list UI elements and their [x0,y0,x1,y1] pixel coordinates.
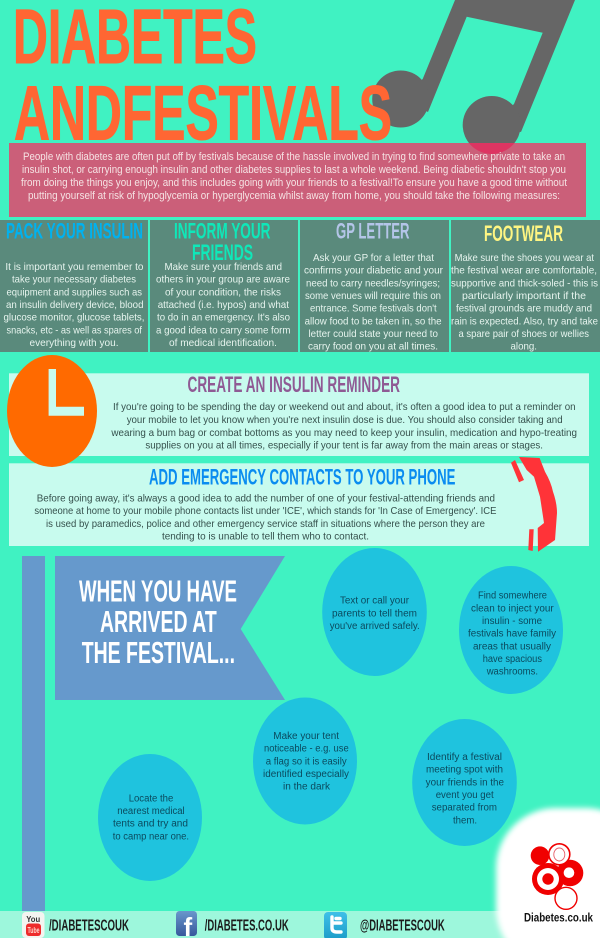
bubble: identify a meeting spot [412,719,517,846]
text: pack your insulin: It is important you remember to [5,261,144,273]
panel: footwear [451,220,600,353]
text: gp letter: Ask your GP for a letter that [313,252,434,264]
text: footwear: a spare pair of shoes or wellies [458,328,589,340]
text: insulin reminder: wearing a bum bag or combat bottoms as you may need to keep your insulin, medication and hypo-treating [110,427,577,439]
bubble: find somewhere clean: areas that usually [473,641,551,652]
heading: inform your friends: FRIENDS [192,240,253,265]
bubble: find somewhere clean: festivals have family [468,629,556,640]
bubble: find somewhere clean: Find somewhere [478,591,548,602]
text: emergency contacts: is used by paramedics, police and other emergency service staff in situations where the person they are [46,518,485,530]
text: inform your friends: Make sure your friends and [164,261,282,273]
flag heading [79,574,237,670]
bubble: locate medical tents: nearest medical [117,806,185,817]
text: inform your friends: of medical identification. [169,337,277,349]
text: inform your friends: of your condition, the risks [165,286,281,298]
bubble: text or call your parents [322,548,427,676]
text: footwear: along. [510,341,537,353]
flag pole [22,556,45,911]
text: pack your insulin: an insulin delivery device, blood [6,299,144,311]
bubble: identify a meeting spot: your friends in the [426,777,505,788]
bubble: make your tent noticeable: identified especially [263,769,349,780]
text: pack your insulin: snacks, etc - as well as spares of [6,324,142,336]
text: gp letter [304,252,443,353]
footer label: twitter: @DIABETESCOUK [360,918,445,935]
text: inform your friends: attached (i.e. hypos) and what [158,299,289,311]
icon: twitter [324,912,347,938]
text: gp letter: confirms your diabetic and your [304,265,443,277]
panel: pack your insulin [0,218,148,352]
bubble: find somewhere clean: clean to inject your [471,603,554,614]
text: emergency contacts: Before going away, it's always a good idea to add the number of one of your festival-attending friends and [37,492,495,504]
white logo blob [496,808,600,938]
text: inform your friends [156,261,291,349]
text: emergency contacts: someone at home to your mobile phone contacts list under 'ICE', which stands for 'In Case of Emergency'. ICE [34,505,496,517]
bubble: identify a meeting spot: them. [453,815,477,826]
text: gp letter: entrance. Some festivals don't [310,303,437,315]
panel: introduction [9,143,586,217]
bubble: make your tent noticeable: in the dark [283,782,330,793]
icon: facebook [176,911,197,938]
bubble: locate medical tents: to camp near one. [113,831,189,842]
text: pack your insulin: glucose monitor, glucose tablets, [4,312,144,324]
text: pack your insulin: take your necessary diabetes [12,274,136,286]
bubble: locate medical tents: tents and try and [113,819,188,830]
bubble: text or call your parents: Text or call your [340,596,410,607]
bubble: text or call your parents: you've arrived safely. [330,621,420,632]
text: footwear: festival grounds are muddy and [456,303,592,315]
bubble: identify a meeting spot: event you get [436,790,494,801]
text: emergency contacts [34,492,496,542]
bubble: identify a meeting spot: Identify a festival [427,752,502,763]
heading: pack your insulin: PACK YOUR INSULIN [6,218,143,244]
text: footwear [451,252,598,353]
bubble: identify a meeting spot: meeting spot with [426,765,503,776]
title [13,0,392,157]
panel: inform your friends [150,218,298,352]
text: inform your friends: to do in an emergency. It's also [157,312,290,324]
text: insulin reminder: If you're going to be spending the day or weekend out and about, it's often a good idea to put a reminder on [113,401,576,413]
text: gp letter: some venues will require this on [305,290,441,302]
text: inform your friends: a good idea to carry some form [156,324,291,336]
footer label: facebook: /DIABETES.CO.UK [205,918,289,935]
heading: inform your friends [174,218,271,265]
text: insulin reminder [110,401,577,452]
icon: youtube: You [26,914,40,924]
panel: gp letter [300,218,449,353]
heading: inform your friends: INFORM YOUR [174,218,271,244]
text: pack your insulin [4,261,144,349]
text: pack your insulin: equipment and supplies such as [6,286,142,298]
bubble: text or call your parents: parents to tell them [332,608,417,619]
introduction text [21,151,567,202]
text: inform your friends: others in your group are aware [156,274,290,286]
bubble: make your tent noticeable: noticeable - e.g. use [264,744,349,755]
text: gp letter: carry food on you at all times. [308,341,438,353]
bubble: make your tent noticeable: Make your tent [273,731,339,742]
bubble: find somewhere clean: insulin - some [482,616,543,627]
flag heading: THE FESTIVAL... [82,635,235,670]
text: emergency contacts: tending to is unable to tell them who to contact. [162,530,369,542]
text: pack your insulin: everything with you. [30,337,118,349]
logo: diabetes.co.uk [524,844,593,925]
icon: youtube [22,912,44,938]
bubble: find somewhere clean: washrooms. [486,667,538,678]
bubble: find somewhere clean [459,566,563,694]
text: gp letter: letter could state your need to [308,328,438,340]
bubble: make your tent noticeable [253,698,357,824]
bubble: find somewhere clean: have spacious [483,654,542,665]
text: gp letter: need to carry needles/syringes; [306,277,440,289]
panel: create an insulin reminder [9,372,589,456]
heading: create an insulin reminder: CREATE AN INSULIN REMINDER [188,372,400,397]
text: footwear: particularly important if the [462,290,586,302]
icon: telephone handset [511,457,557,552]
text: gp letter: allow food to be taken in, so the [305,315,442,327]
bubble: identify a meeting spot: separated from [432,803,497,814]
icon: music note [372,0,575,154]
text: insulin reminder: your mobile to let you know when you're next insulin dose is due. You should also consider taking and [127,414,563,426]
footer label: youtube: /DIABETESCOUK [49,918,129,935]
title: ANDFESTIVALS [14,71,392,157]
bubble: locate medical tents: Locate the [129,793,174,804]
heading: gp letter: GP LETTER [336,218,410,244]
text: insulin reminder: supplies on you at all times, especially if your tent is far away from the main areas or stages. [145,440,543,452]
panel: add emergency contacts [9,463,589,546]
icon: youtube: Tube [28,925,40,935]
footer bar [0,911,600,938]
bubble: locate medical tents [98,754,202,881]
bubble: make your tent noticeable: a flag so it is easily [266,756,347,767]
icon: clock [7,355,97,467]
flag banner [55,556,285,700]
flag heading: ARRIVED AT [100,604,217,639]
flag heading: WHEN YOU HAVE [79,574,237,609]
